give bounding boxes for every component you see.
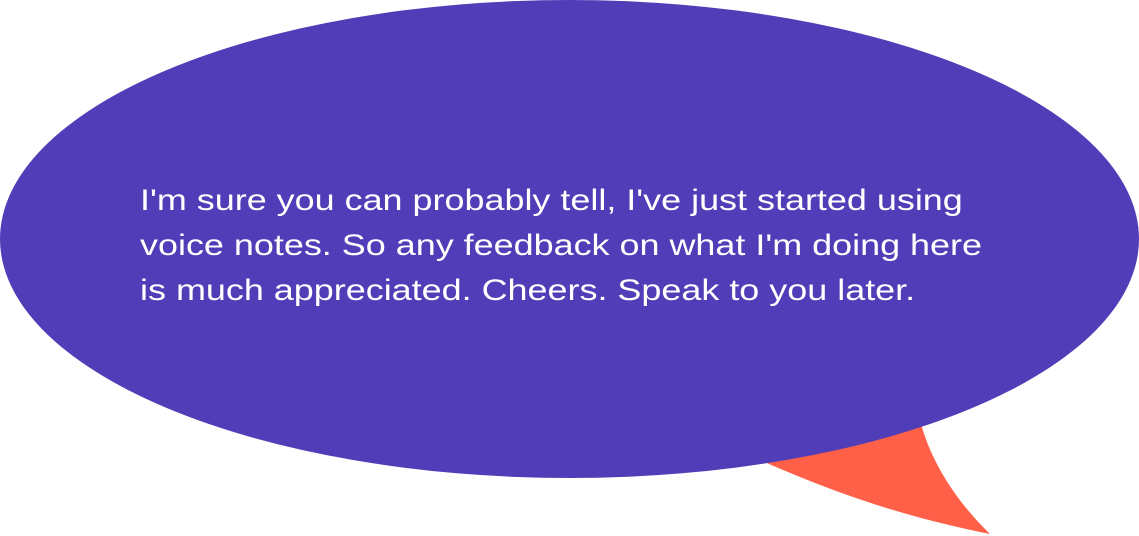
bubble tail xyxy=(760,420,990,534)
bubble text xyxy=(140,184,982,307)
bubble text: is much appreciated. Cheers. Speak to you later. xyxy=(140,274,915,307)
bubble text: I'm sure you can probably tell, I've just started using xyxy=(140,184,963,217)
bubble text: voice notes. So any feedback on what I'm doing here xyxy=(140,229,982,262)
